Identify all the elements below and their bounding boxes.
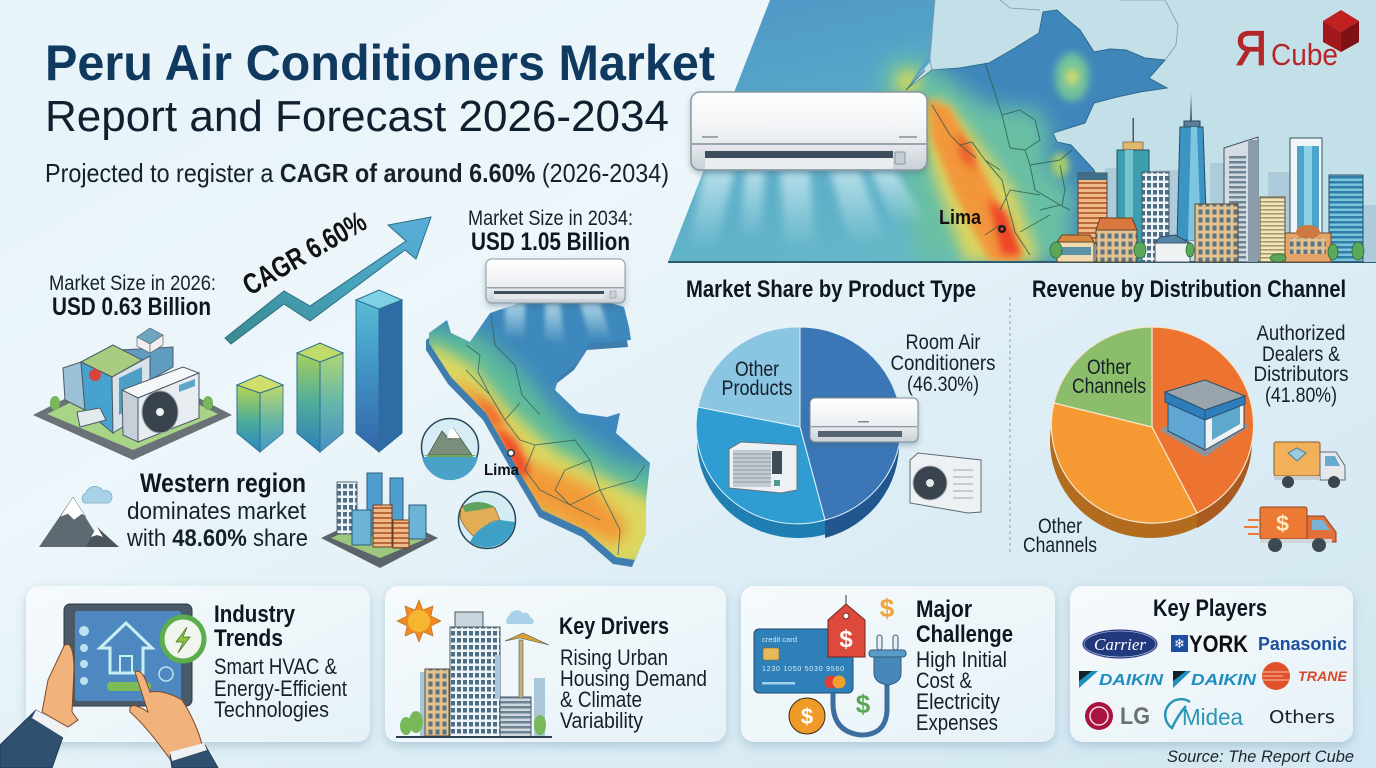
slice: authorized dealers xyxy=(1152,327,1254,513)
cube mark xyxy=(1323,10,1359,52)
icon: outdoor unit xyxy=(910,453,981,513)
label: Lima: Lima xyxy=(939,207,982,229)
icon: window AC xyxy=(729,442,797,493)
heading: Challenge xyxy=(916,621,1013,648)
text: market size 2026: Market Size in 2026: xyxy=(49,272,216,295)
air conditioner hero xyxy=(688,92,927,250)
icon: urban construction xyxy=(396,600,552,738)
region borders xyxy=(466,315,645,555)
ocean panel xyxy=(668,0,1376,262)
logo: Daikin: DAIKIN xyxy=(1099,672,1164,689)
icon: cost and electricity: 1230 1050 5030 9560 xyxy=(762,666,844,673)
region borders xyxy=(906,63,1072,255)
icon: mountain circle xyxy=(422,418,478,480)
right hand xyxy=(130,671,202,762)
glass tower right xyxy=(1290,138,1322,234)
text: market size 2034: USD 1.05 Billion xyxy=(471,228,630,256)
bar 2034 xyxy=(356,290,402,452)
label: room air conditioners: Conditioners xyxy=(890,352,996,375)
pie chart: distribution channel xyxy=(1050,327,1254,538)
panel: key drivers xyxy=(385,586,726,742)
brick tower xyxy=(1078,173,1107,243)
label: authorized dealers xyxy=(1254,322,1348,407)
logo: LG xyxy=(1085,702,1150,730)
body text: Housing Demand xyxy=(560,666,707,691)
logo: Midea: Midea xyxy=(1182,704,1243,730)
Peru silhouette xyxy=(906,10,1167,262)
map of Peru xyxy=(426,304,650,567)
small air conditioner above map xyxy=(486,259,625,345)
grey tower xyxy=(1224,137,1258,262)
body text xyxy=(916,647,1007,735)
pie depth xyxy=(697,344,899,538)
airflow xyxy=(505,303,612,345)
logo: Daikin xyxy=(1079,671,1164,689)
land panel xyxy=(906,0,1376,262)
label: authorized dealers: (41.80%) xyxy=(1265,384,1337,407)
label: authorized dealers: Dealers & xyxy=(1262,343,1340,366)
slice: room air conditioners xyxy=(800,327,901,520)
icon: wall AC on pie xyxy=(810,398,918,442)
pie depth xyxy=(1050,344,1252,538)
banded blue tower xyxy=(1329,175,1363,262)
icon: mountains and cloud xyxy=(39,486,119,547)
body text: High Initial xyxy=(916,647,1007,672)
text: market size 2034: Market Size in 2034: xyxy=(468,207,633,230)
slice: other products xyxy=(698,327,800,427)
cold airflow xyxy=(688,170,925,250)
logo: YORK xyxy=(1171,631,1249,658)
text: western region: with 48.60% share xyxy=(126,525,308,552)
panel: industry trends xyxy=(0,586,370,768)
label: other channels green: Channels xyxy=(1072,375,1146,398)
text: western region: dominates market xyxy=(127,498,306,525)
cream tower xyxy=(1260,197,1285,262)
heat overlay xyxy=(429,320,650,560)
logo: RCube xyxy=(1235,10,1359,76)
logo: Trane xyxy=(1262,662,1348,690)
body text: Expenses xyxy=(916,710,998,735)
text: market size 2034 xyxy=(468,207,633,256)
label: room air conditioners xyxy=(890,331,996,396)
logo: LG: LG xyxy=(1120,703,1150,730)
label: Lima xyxy=(939,207,1006,233)
icon: cost and electricity xyxy=(754,593,906,735)
text: western region: Western region xyxy=(140,468,306,498)
heading: Trends xyxy=(214,625,283,652)
body text xyxy=(214,654,347,722)
label: authorized dealers: Distributors xyxy=(1254,363,1348,386)
panel: major challenge xyxy=(741,586,1055,742)
heading: market share: Market Share by Product Type xyxy=(686,276,976,303)
body text: Energy-Efficient xyxy=(214,676,347,701)
icon: cost and electricity: $ xyxy=(880,593,895,623)
body text: Electricity xyxy=(916,689,1000,714)
subtitle: Projected to register a CAGR of around 6.60% (2026-2034) xyxy=(45,158,669,188)
city skyline xyxy=(1050,93,1376,262)
label: other products: Other xyxy=(735,358,779,381)
heading: Industry xyxy=(214,601,296,628)
card xyxy=(385,586,726,742)
heading xyxy=(214,601,296,652)
bar chart xyxy=(237,290,402,452)
label: CAGR: CAGR 6.60% xyxy=(238,206,372,302)
indoor unit xyxy=(691,92,927,170)
body text: & Climate xyxy=(560,687,642,712)
low buildings xyxy=(1057,218,1331,262)
label: other channels orange xyxy=(1023,515,1097,557)
teal tower xyxy=(1117,118,1149,262)
growth arrow xyxy=(225,217,431,344)
icon: money truck xyxy=(1244,507,1336,552)
logo: Trane: TRANE xyxy=(1298,668,1348,684)
card xyxy=(741,586,1055,742)
logo: Panasonic: Panasonic xyxy=(1258,634,1347,654)
heat overlay xyxy=(880,53,1089,262)
slice: window units xyxy=(696,407,825,524)
icon: shop xyxy=(1160,380,1249,457)
label: other channels orange: Other xyxy=(1038,515,1082,538)
label: others: Others xyxy=(1269,707,1335,728)
logo: Midea xyxy=(1165,699,1243,730)
tan office xyxy=(1195,204,1238,262)
blue glass skyscraper xyxy=(1177,93,1207,240)
label: Lima: Lima xyxy=(484,462,519,479)
logo: Carrier xyxy=(1082,629,1158,659)
trees xyxy=(1050,242,1364,262)
logo: Daikin second: DAIKIN xyxy=(1191,672,1257,689)
heading xyxy=(916,596,1013,648)
logo: RCube: Cube xyxy=(1271,37,1338,72)
logo: YORK: YORK xyxy=(1189,631,1249,658)
icon: delivery truck xyxy=(1274,442,1345,488)
body text: Technologies xyxy=(214,697,329,722)
pie chart: product type xyxy=(696,327,901,538)
label: Lima xyxy=(484,450,519,479)
icon: cost and electricity: credit card xyxy=(762,635,797,644)
card xyxy=(1070,586,1353,742)
baseline xyxy=(668,261,1376,263)
icon: isometric city xyxy=(321,473,438,568)
map body xyxy=(429,303,650,560)
icon: tablet and hands xyxy=(0,604,218,768)
body text: Cost & xyxy=(916,668,972,693)
source note: Source: The Report Cube xyxy=(1167,747,1354,766)
label: other products: Products xyxy=(722,377,792,400)
slice: other channels orange xyxy=(1051,403,1197,523)
icon: money truck: $ xyxy=(1276,511,1289,536)
white grid building xyxy=(1142,172,1169,262)
title: Peru Air Conditioners Market xyxy=(45,35,715,91)
label: authorized dealers: Authorized xyxy=(1256,322,1346,345)
logo: Daikin second xyxy=(1173,671,1257,689)
heading: Key Players xyxy=(1153,595,1267,622)
logo: RCube: Я xyxy=(1235,23,1267,76)
heading: Major xyxy=(916,596,972,623)
hero map of Peru with heat overlay xyxy=(668,0,1376,263)
text: western region xyxy=(126,468,308,552)
icon: cost and electricity: $ xyxy=(839,626,853,653)
label: other products xyxy=(722,358,792,400)
icon: cost and electricity: $ xyxy=(856,689,871,719)
body text xyxy=(560,645,707,733)
label: other channels green: Other xyxy=(1087,356,1131,379)
icon: beach circle xyxy=(458,492,516,548)
slice: other channels green xyxy=(1054,327,1152,427)
body text: Variability xyxy=(560,708,643,733)
label: other channels orange: Channels xyxy=(1023,534,1097,557)
logo: YORK: ❄ xyxy=(1174,637,1185,652)
bar mid xyxy=(297,343,343,452)
text: market size 2026 xyxy=(49,272,216,321)
heading: Key Drivers xyxy=(559,613,669,640)
body text: Rising Urban xyxy=(560,645,668,670)
icon: hospital with outdoor unit xyxy=(33,328,232,460)
title: Report and Forecast 2026-2034 xyxy=(45,92,669,141)
card xyxy=(26,586,370,742)
label: room air conditioners: (46.30%) xyxy=(907,373,979,396)
map shadow xyxy=(426,310,647,567)
label: room air conditioners: Room Air xyxy=(906,331,981,354)
left hand xyxy=(42,644,78,727)
background silhouettes xyxy=(1105,163,1376,262)
body text: Smart HVAC & xyxy=(214,654,337,679)
icon: cost and electricity: $ xyxy=(801,704,813,729)
bar 2026 xyxy=(237,375,283,452)
panel: key players xyxy=(1070,586,1353,742)
text: market size 2026: USD 0.63 Billion xyxy=(52,293,211,321)
label: other channels green xyxy=(1072,356,1146,398)
title xyxy=(45,35,715,141)
logo: Carrier: Carrier xyxy=(1094,635,1146,654)
